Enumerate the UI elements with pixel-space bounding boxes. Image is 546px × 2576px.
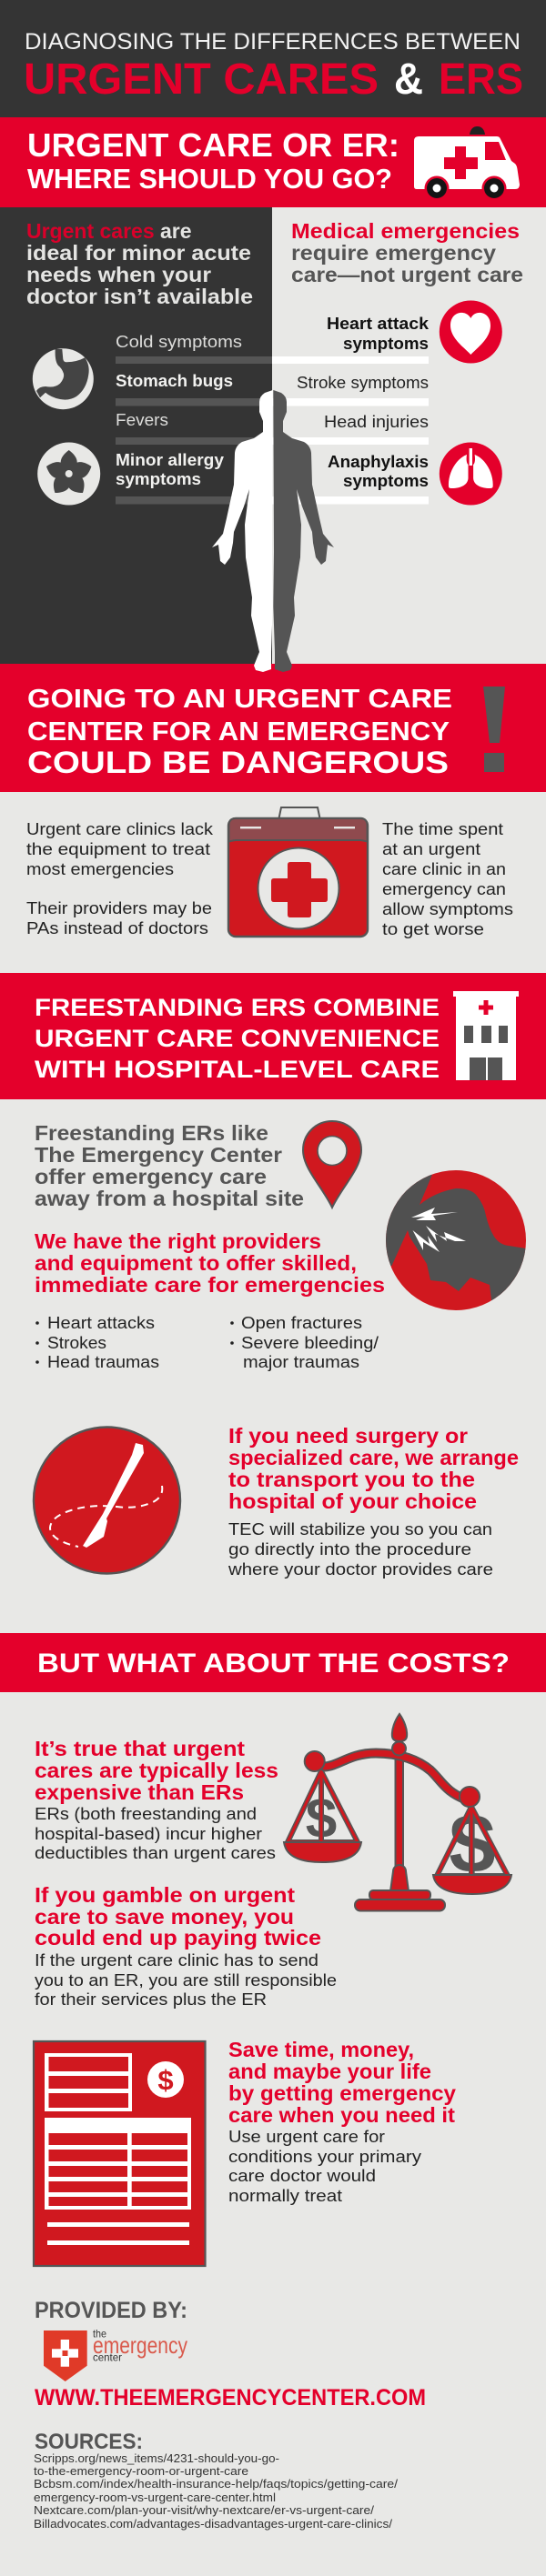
list: emergency symptoms: Stroke symptoms bbox=[297, 374, 429, 392]
list: emergencies treated, column one: Strokes bbox=[47, 1334, 106, 1352]
text: urgent cares intro: Urgent cares are bbox=[26, 219, 192, 243]
banner: going to an urgent care center could be dangerous: CENTER FOR AN EMERGENCY bbox=[27, 717, 450, 747]
text: TEC stabilization: TEC will stabilize you so you can bbox=[228, 1520, 492, 1539]
text: urgent cares less expensive: deductibles than urgent cares bbox=[35, 1844, 276, 1862]
text: urgent cares intro: needs when your bbox=[26, 263, 211, 286]
list: emergency symptoms: symptoms bbox=[343, 335, 429, 353]
text: right providers heading: We have the right providers bbox=[35, 1229, 321, 1253]
text: medical emergencies intro: care—not urgent care bbox=[291, 263, 523, 286]
text: save time, money, and maybe your life: Use urgent care for bbox=[228, 2128, 385, 2146]
text: freestanding ERs description: offer emergency care bbox=[35, 1165, 267, 1188]
text: time spent: care clinic in an bbox=[382, 860, 506, 878]
text: TEC stabilization: where your doctor provides care bbox=[228, 1560, 493, 1579]
text: save time, money, and maybe your life: and maybe your life bbox=[228, 2060, 431, 2083]
icon: balance scale with dollar signs: $ bbox=[306, 1788, 337, 1850]
text: time spent: at an urgent bbox=[382, 840, 480, 858]
text: urgent cares intro bbox=[26, 219, 253, 308]
text: sources: Billadvocates.com/advantages-disadvantages-urgent-care-clinics/ bbox=[34, 2518, 393, 2531]
text: TEC stabilization: go directly into the procedure bbox=[228, 1540, 471, 1559]
text: freestanding ERs description: The Emergency Center bbox=[35, 1143, 282, 1167]
text: equipment and providers: Their providers may be bbox=[26, 899, 212, 917]
list: emergencies treated, column two: major traumas bbox=[243, 1353, 359, 1371]
list: urgent care symptoms: Fevers bbox=[116, 411, 168, 429]
text: freestanding ERs description: away from a hospital site bbox=[35, 1187, 304, 1210]
list: emergencies treated, column one bbox=[35, 1314, 159, 1371]
text: provided by: PROVIDED BY: bbox=[35, 2298, 187, 2323]
text: freestanding ERs description bbox=[35, 1121, 304, 1210]
text: urgent cares less expensive: hospital-based) incur higher bbox=[35, 1825, 262, 1843]
list: emergency symptoms: symptoms bbox=[343, 472, 429, 490]
symptom divider bars bbox=[116, 356, 429, 504]
text: sources: emergency-room-vs-urgent-care-center.html bbox=[34, 2491, 276, 2504]
text: right providers heading bbox=[35, 1229, 385, 1297]
banner: freestanding ERs bbox=[0, 973, 546, 1099]
banner: urgent care or ER: URGENT CARE OR ER: bbox=[27, 126, 399, 164]
icon: balance scale with dollar signs: $ bbox=[449, 1798, 496, 1890]
text: save time, money, and maybe your life: care doctor would bbox=[228, 2167, 376, 2185]
text: medical emergencies intro: Medical emergencies bbox=[291, 219, 520, 243]
list: emergencies treated, column two bbox=[230, 1314, 379, 1371]
text: website address: WWW.THEEMERGENCYCENTER.COM bbox=[35, 2385, 426, 2411]
text: save time, money, and maybe your life: by getting emergency bbox=[228, 2081, 456, 2105]
icon: head trauma bbox=[386, 1170, 526, 1310]
icon: first aid kit bbox=[228, 807, 368, 937]
list: urgent care symptoms bbox=[116, 333, 242, 488]
icon: flower bbox=[37, 442, 100, 506]
text: surgery transport heading: hospital of your choice bbox=[228, 1489, 477, 1513]
banner: freestanding ERs: WITH HOSPITAL-LEVEL CARE bbox=[35, 1056, 440, 1083]
banner: freestanding ERs: FREESTANDING ERS COMBINE bbox=[35, 994, 440, 1021]
text: equipment and providers: most emergencies bbox=[26, 860, 174, 878]
text: sources: to-the-emergency-room-or-urgent-care bbox=[34, 2465, 248, 2478]
text: right providers heading: and equipment to offer skilled, bbox=[35, 1251, 357, 1275]
icon: location pin bbox=[303, 1121, 361, 1208]
text: sources: SOURCES: bbox=[35, 2430, 143, 2454]
text: urgent cares intro: ideal for minor acute bbox=[26, 241, 251, 265]
text: could end up paying twice: could end up paying twice bbox=[35, 1926, 321, 1950]
banner: urgent care or ER: WHERE SHOULD YOU GO? bbox=[27, 163, 392, 195]
text: surgery transport heading: If you need surgery or bbox=[228, 1424, 468, 1448]
text: urgent cares less expensive: It’s true that urgent bbox=[35, 1737, 245, 1760]
text: save time, money, and maybe your life: Save time, money, bbox=[228, 2038, 414, 2061]
banner: what about the costs: BUT WHAT ABOUT THE COSTS? bbox=[37, 1649, 510, 1679]
text: surgery transport heading: specialized care, we arrange bbox=[228, 1446, 519, 1469]
text: sources: Bcbsm.com/index/health-insurance-help/faqs/topics/getting-care/ bbox=[34, 2478, 399, 2491]
text: sources: Scripps.org/news_items/4231-should-you-go- bbox=[34, 2452, 279, 2465]
text: urgent cares less expensive bbox=[35, 1737, 278, 1862]
text: equipment and providers: PAs instead of doctors bbox=[26, 919, 208, 937]
text: equipment and providers bbox=[26, 820, 214, 937]
banner: going to an urgent care center could be dangerous bbox=[0, 664, 546, 792]
panel: urgent care versus emergency comparison bbox=[0, 207, 546, 672]
banner: what about the costs bbox=[0, 1633, 546, 1692]
text: sources: Nextcare.com/plan-your-visit/why-nextcare/er-vs-urgent-care/ bbox=[34, 2504, 375, 2517]
icon: ambulance bbox=[414, 126, 520, 200]
text: TEC stabilization bbox=[228, 1520, 493, 1579]
list: urgent care symptoms: Stomach bugs bbox=[116, 372, 233, 390]
icon: scalpel bbox=[34, 1428, 180, 1573]
icon: hospital building bbox=[453, 991, 519, 1080]
icon: balance scale with dollar signs bbox=[284, 1714, 511, 1911]
text: could end up paying twice: care to save money, you bbox=[35, 1905, 294, 1929]
list: emergency symptoms bbox=[297, 315, 430, 490]
panel: why urgent care is dangerous for emergencies bbox=[0, 792, 546, 973]
list: urgent care symptoms: Cold symptoms bbox=[116, 333, 242, 351]
list: emergencies treated, column two: Severe bleeding/ bbox=[241, 1334, 379, 1352]
title header: DIAGNOSING THE DIFFERENCES BETWEEN bbox=[25, 29, 521, 55]
list: emergencies treated, column one: Heart attacks bbox=[47, 1314, 155, 1332]
text: save time, money, and maybe your life bbox=[228, 2038, 456, 2205]
title header: URGENT CARES bbox=[24, 55, 379, 104]
text: urgent cares intro: doctor isn’t available bbox=[26, 285, 253, 308]
logo: the emergency center: center bbox=[93, 2351, 122, 2364]
logo: the emergency center: the bbox=[93, 2328, 106, 2340]
text: could end up paying twice: If you gamble on urgent bbox=[35, 1883, 295, 1907]
text: urgent cares less expensive: cares are typically less bbox=[35, 1759, 278, 1782]
text: medical emergencies intro: require emergency bbox=[291, 241, 496, 265]
logo: the emergency center: emergency bbox=[93, 2331, 187, 2359]
text: equipment and providers: the equipment to treat bbox=[26, 840, 210, 858]
text: time spent: allow symptoms bbox=[382, 900, 513, 918]
text: sources bbox=[34, 2430, 399, 2531]
text: could end up paying twice: for their services plus the ER bbox=[35, 1990, 267, 2009]
text: medical emergencies intro bbox=[291, 219, 523, 286]
banner: urgent care or ER bbox=[0, 117, 546, 207]
text: save time, money, and maybe your life: conditions your primary bbox=[228, 2148, 421, 2166]
title header: & bbox=[394, 55, 423, 104]
icon: human body silhouette bbox=[212, 390, 334, 672]
icon: exclamation mark bbox=[483, 687, 505, 772]
panel: costs bbox=[0, 1692, 546, 2576]
icon: medical bill bbox=[34, 2041, 206, 2266]
text: save time, money, and maybe your life: normally treat bbox=[228, 2187, 342, 2205]
list: emergencies treated, column two: Open fractures bbox=[241, 1314, 362, 1332]
text: right providers heading: immediate care for emergencies bbox=[35, 1273, 385, 1297]
text: surgery transport heading: to transport you to the bbox=[228, 1468, 475, 1491]
panel: freestanding ER details bbox=[33, 1120, 526, 1579]
icon: heart bbox=[440, 300, 502, 364]
list: urgent care symptoms: Minor allergy bbox=[116, 451, 224, 469]
banner: going to an urgent care center could be dangerous: GOING TO AN URGENT CARE bbox=[27, 685, 452, 714]
text: time spent: to get worse bbox=[382, 920, 484, 938]
text: equipment and providers: Urgent care clinics lack bbox=[26, 820, 214, 838]
text: time spent bbox=[382, 820, 513, 938]
list: emergencies treated, column one: Head traumas bbox=[47, 1353, 159, 1371]
list: emergency symptoms: Anaphylaxis bbox=[328, 453, 429, 471]
list: urgent care symptoms: symptoms bbox=[116, 470, 201, 488]
icon: lungs bbox=[440, 442, 502, 506]
text: freestanding ERs description: Freestanding ERs like bbox=[35, 1121, 268, 1145]
icon: stomach bbox=[33, 348, 94, 409]
title header: ERS bbox=[439, 55, 523, 104]
text: could end up paying twice: If the urgent care clinic has to send bbox=[35, 1951, 318, 1970]
text: save time, money, and maybe your life: care when you need it bbox=[228, 2103, 455, 2127]
text: urgent cares less expensive: ERs (both freestanding and bbox=[35, 1805, 257, 1823]
title header bbox=[0, 0, 546, 118]
banner: going to an urgent care center could be dangerous: COULD BE DANGEROUS bbox=[27, 746, 449, 780]
text: time spent: The time spent bbox=[382, 820, 503, 838]
text: could end up paying twice: you to an ER, you are still responsible bbox=[35, 1971, 337, 1990]
text: could end up paying twice bbox=[35, 1883, 337, 2009]
banner: freestanding ERs: URGENT CARE CONVENIENCE bbox=[35, 1025, 440, 1052]
text: urgent cares less expensive: expensive than ERs bbox=[35, 1780, 244, 1804]
icon: medical bill: $ bbox=[157, 2064, 174, 2096]
list: emergency symptoms: Head injuries bbox=[324, 413, 429, 431]
list: emergency symptoms: Heart attack bbox=[327, 315, 430, 333]
logo: the emergency center bbox=[44, 2328, 187, 2381]
text: time spent: emergency can bbox=[382, 880, 506, 898]
text: surgery transport heading bbox=[228, 1424, 519, 1513]
